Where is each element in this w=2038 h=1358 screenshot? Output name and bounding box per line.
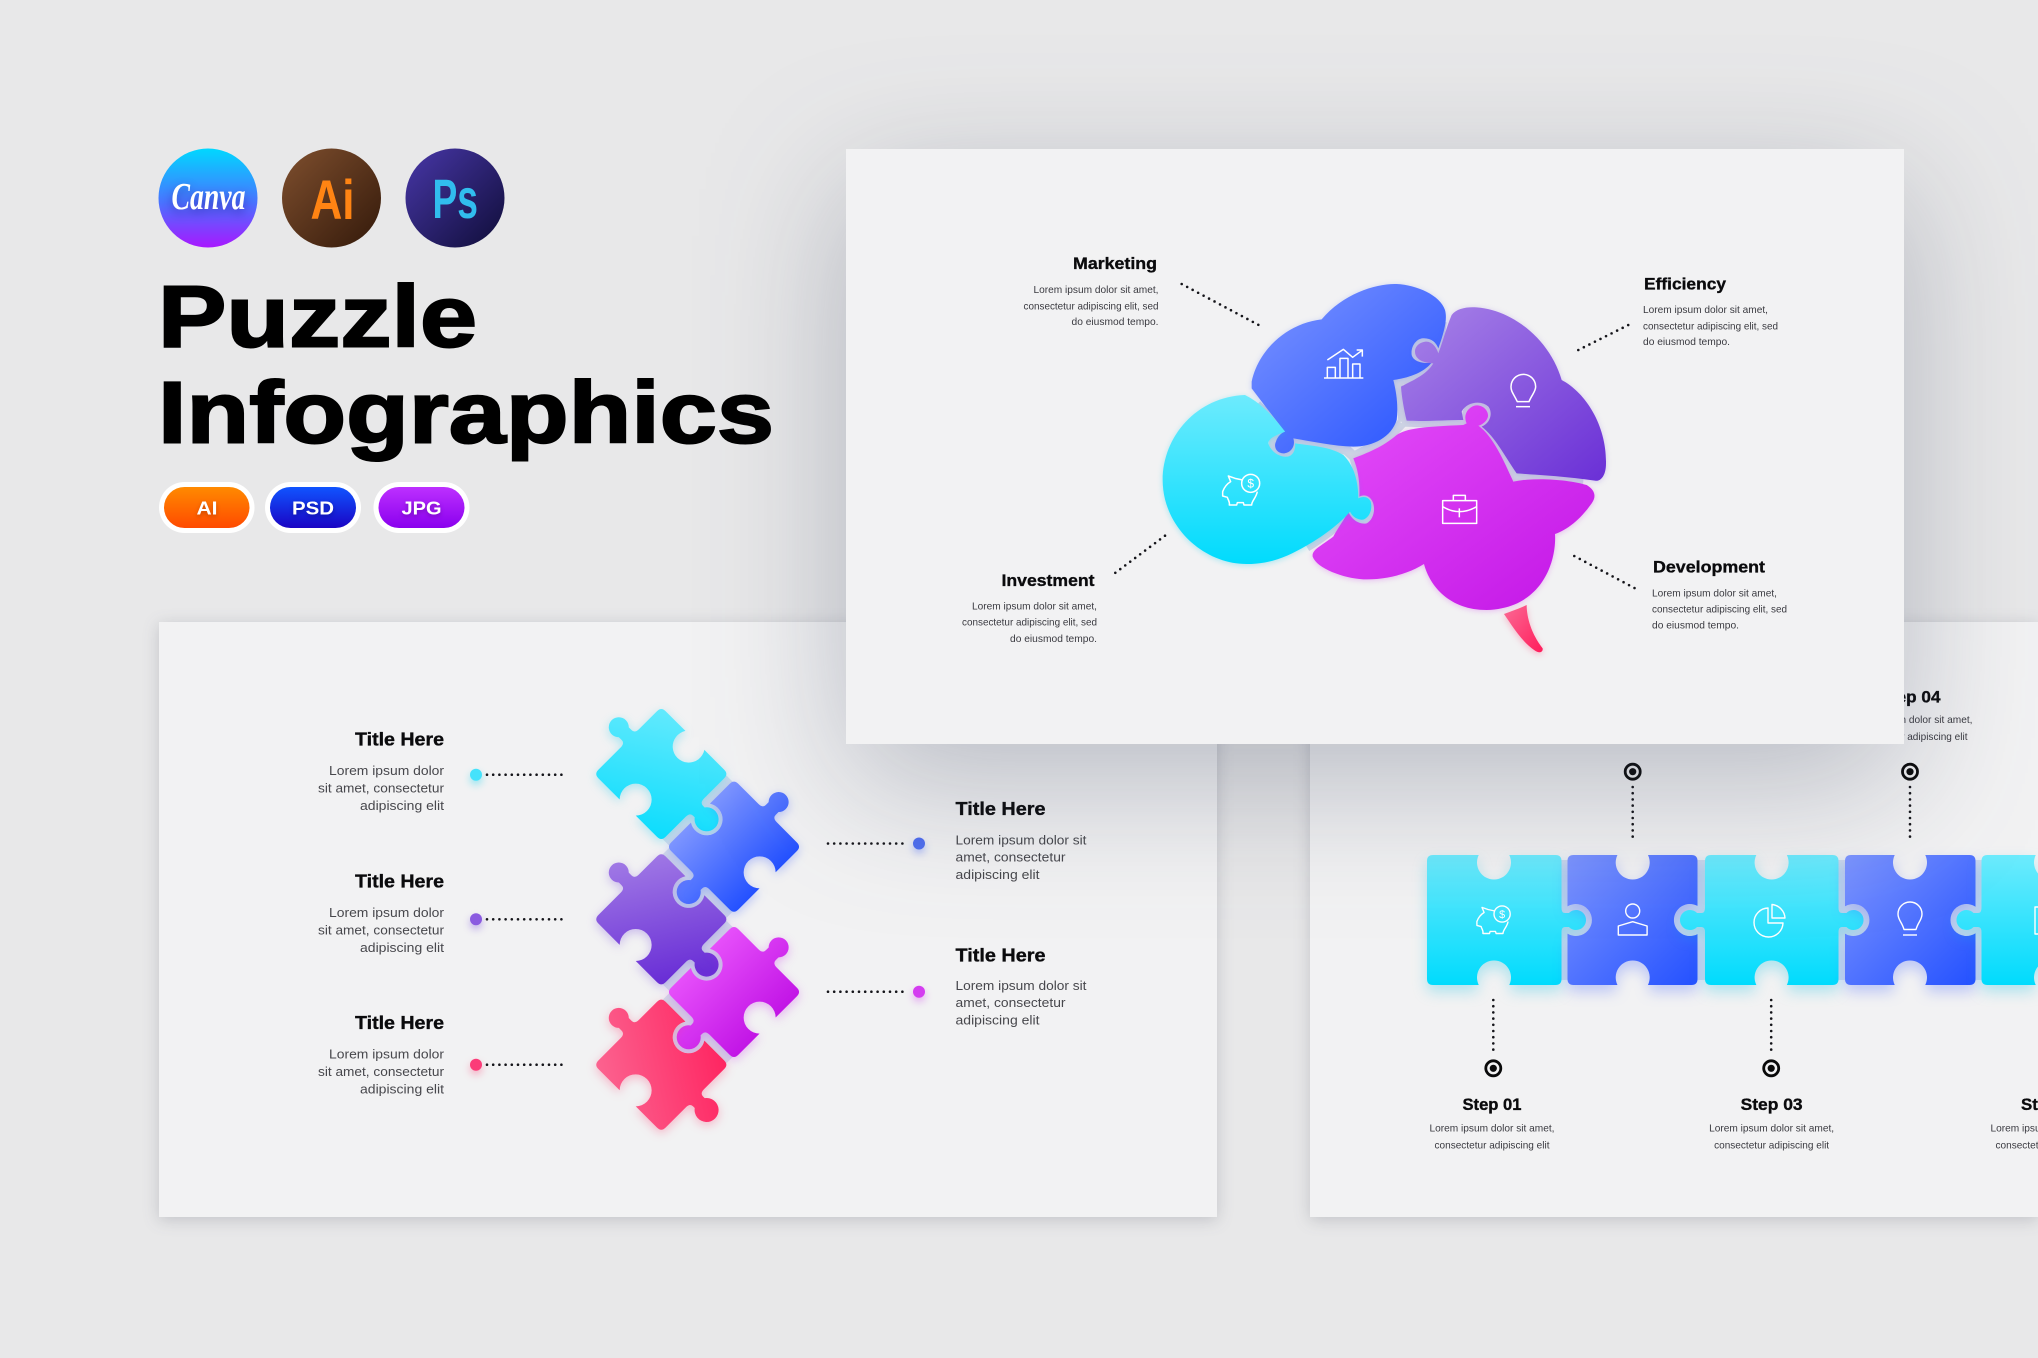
text: step 05 <box>1990 1095 2038 1151</box>
text: marketing: consectetur adipiscing elit, sed <box>1024 300 1159 312</box>
right callout 2: adipiscing elit <box>956 1012 1040 1028</box>
title: Infographics <box>158 364 774 462</box>
icon: Illustrator badge <box>282 148 381 248</box>
badge: PSD format: PSD <box>292 498 334 518</box>
connector with blue dot <box>828 838 925 850</box>
step piece 2 <box>1568 855 1698 985</box>
text: step 04 <box>1848 688 1972 743</box>
left callout 1: adipiscing elit <box>360 798 444 813</box>
text: development: Lorem ipsum dolor sit amet, <box>1652 588 1777 600</box>
text: efficiency: Efficiency <box>1644 274 1727 294</box>
puzzle piece: magenta <box>647 907 819 1079</box>
text: step 01: consectetur adipiscing elit <box>1434 1139 1550 1151</box>
brain stem <box>1504 605 1543 652</box>
left callout 2: sit amet, consectetur <box>318 922 445 938</box>
icon: pie chart <box>1754 904 1785 937</box>
connector: investment <box>1111 536 1165 576</box>
brain puzzle <box>1163 284 1606 652</box>
left callout 3: Title Here <box>355 1013 444 1033</box>
marker: step 3 bottom <box>1764 1000 1779 1076</box>
text: efficiency: Lorem ipsum dolor sit amet, <box>1643 304 1768 316</box>
icon: bulb <box>1511 374 1536 407</box>
icon: piggy bank: $ <box>1247 477 1254 491</box>
right callout 1: Title Here <box>956 799 1046 819</box>
left callout 3: adipiscing elit <box>360 1081 444 1096</box>
left callout 2: adipiscing elit <box>360 940 444 955</box>
puzzle gaps <box>646 775 750 1080</box>
connector: development <box>1574 556 1635 588</box>
left callout 3 <box>318 1013 445 1096</box>
panel: puzzle stack slide <box>159 622 1217 1217</box>
panel: brain slide <box>846 149 1904 744</box>
connector: efficiency <box>1578 325 1628 350</box>
connector: marketing <box>1182 284 1260 326</box>
text: investment: do eiusmod tempo. <box>1010 633 1097 645</box>
text: investment: Investment <box>1002 571 1095 590</box>
left callout 2 <box>318 872 445 955</box>
text: marketing: Lorem ipsum dolor sit amet, <box>1034 284 1158 296</box>
right callout 1: amet, consectetur <box>956 850 1066 864</box>
brain piece: purple efficiency <box>1401 307 1606 481</box>
text: step 03: Step 03 <box>1741 1095 1803 1114</box>
text: step 03: consectetur adipiscing elit <box>1714 1139 1829 1151</box>
icon: Canva badge <box>158 148 258 248</box>
left callout 2: Lorem ipsum dolor <box>329 905 445 920</box>
puzzle piece: purple <box>576 834 749 1007</box>
badge: AI format <box>159 482 254 533</box>
icon: person <box>1618 904 1647 935</box>
step piece 1 <box>1427 855 1586 985</box>
brain piece: blue marketing <box>1252 284 1446 453</box>
icon: Illustrator badge: Ai <box>310 168 354 231</box>
right callout 2: Lorem ipsum dolor sit <box>956 978 1087 993</box>
icon: Canva badge: Canva <box>172 176 246 218</box>
badge: JPG format <box>374 482 470 533</box>
connector with purple dot <box>470 913 567 925</box>
right callout 2: amet, consectetur <box>956 995 1066 1010</box>
right callout 1: Lorem ipsum dolor sit <box>956 832 1087 848</box>
text: marketing: Marketing <box>1073 254 1157 273</box>
text: marketing: do eiusmod tempo. <box>1072 316 1158 328</box>
text: efficiency: consectetur adipiscing elit, sed <box>1643 320 1778 332</box>
text: step 03 <box>1709 1095 1834 1151</box>
badge: PSD format <box>265 482 361 533</box>
text: step 01: Lorem ipsum dolor sit amet, <box>1430 1123 1554 1135</box>
text: step 04: Lorem ipsum dolor sit amet, <box>1848 714 1972 726</box>
icon: Photoshop badge <box>406 148 504 248</box>
text: efficiency <box>1643 274 1778 348</box>
icon: piggy bank: $ <box>1499 909 1505 921</box>
step piece 4 <box>1845 855 1976 985</box>
marker: step 1 bottom <box>1486 1000 1501 1076</box>
text: step 04: Step 04 <box>1880 688 1941 707</box>
connector with cyan dot <box>470 769 567 781</box>
left callout 2: Title Here <box>355 872 444 892</box>
text: step 01: Step 01 <box>1462 1095 1522 1114</box>
left callout 3: Lorem ipsum dolor <box>329 1046 445 1061</box>
text: efficiency: do eiusmod tempo. <box>1643 336 1730 348</box>
icon: piggy bank <box>1477 906 1510 934</box>
title <box>158 268 774 462</box>
left callout 1: Title Here <box>355 730 444 750</box>
header block <box>158 148 774 533</box>
panel: steps timeline slide <box>1310 622 2038 1217</box>
puzzle piece: cyan <box>576 689 749 861</box>
text: investment: consectetur adipiscing elit, sed <box>962 617 1097 629</box>
right callout 1: adipiscing elit <box>956 867 1040 882</box>
text: step 01 <box>1430 1095 1554 1151</box>
marker: step 2 top <box>1625 764 1640 840</box>
text: development: do eiusmod tempo. <box>1652 620 1739 632</box>
puzzle piece: pink <box>576 979 749 1152</box>
badge: AI format: AI <box>196 498 218 518</box>
text: development: consectetur adipiscing elit, sed <box>1652 604 1787 616</box>
tab rings and gaps <box>1560 860 1982 980</box>
step piece 3 <box>1680 855 1864 985</box>
brain piece: magenta development <box>1313 405 1594 610</box>
text: marketing <box>1024 254 1159 328</box>
right callout 2 <box>956 946 1087 1028</box>
left callout 1: sit amet, consectetur <box>318 780 445 796</box>
text: step 03: Lorem ipsum dolor sit amet, <box>1709 1123 1834 1135</box>
brain piece: cyan investment <box>1163 395 1371 564</box>
connector with pink dot <box>470 1059 567 1071</box>
brain gaps <box>1257 322 1583 547</box>
icon: chart <box>1324 349 1363 378</box>
text: development: Development <box>1653 558 1765 576</box>
icon: light bulb <box>1898 902 1922 935</box>
right callout 1 <box>956 799 1087 882</box>
left callout 3: sit amet, consectetur <box>318 1064 445 1079</box>
text: development <box>1652 558 1787 632</box>
text: investment <box>962 571 1097 645</box>
icon: partial briefcase <box>2035 907 2038 934</box>
text: step 04: consectetur adipiscing elit <box>1852 731 1968 743</box>
icon: piggy bank <box>1223 474 1260 505</box>
icon: briefcase <box>1443 495 1477 523</box>
puzzle piece: blue <box>647 761 819 934</box>
badge: JPG format: JPG <box>402 498 442 518</box>
left callout 1: Lorem ipsum dolor <box>329 763 445 778</box>
text: investment: Lorem ipsum dolor sit amet, <box>972 601 1097 613</box>
right callout 2: Title Here <box>956 946 1046 966</box>
connector with magenta dot <box>828 986 925 998</box>
icon: Photoshop badge: Ps <box>432 167 478 230</box>
left callout 1 <box>318 730 445 813</box>
step piece 5 <box>1956 855 2038 985</box>
title: Puzzle <box>158 268 477 366</box>
marker: step 4 top <box>1902 764 1918 840</box>
